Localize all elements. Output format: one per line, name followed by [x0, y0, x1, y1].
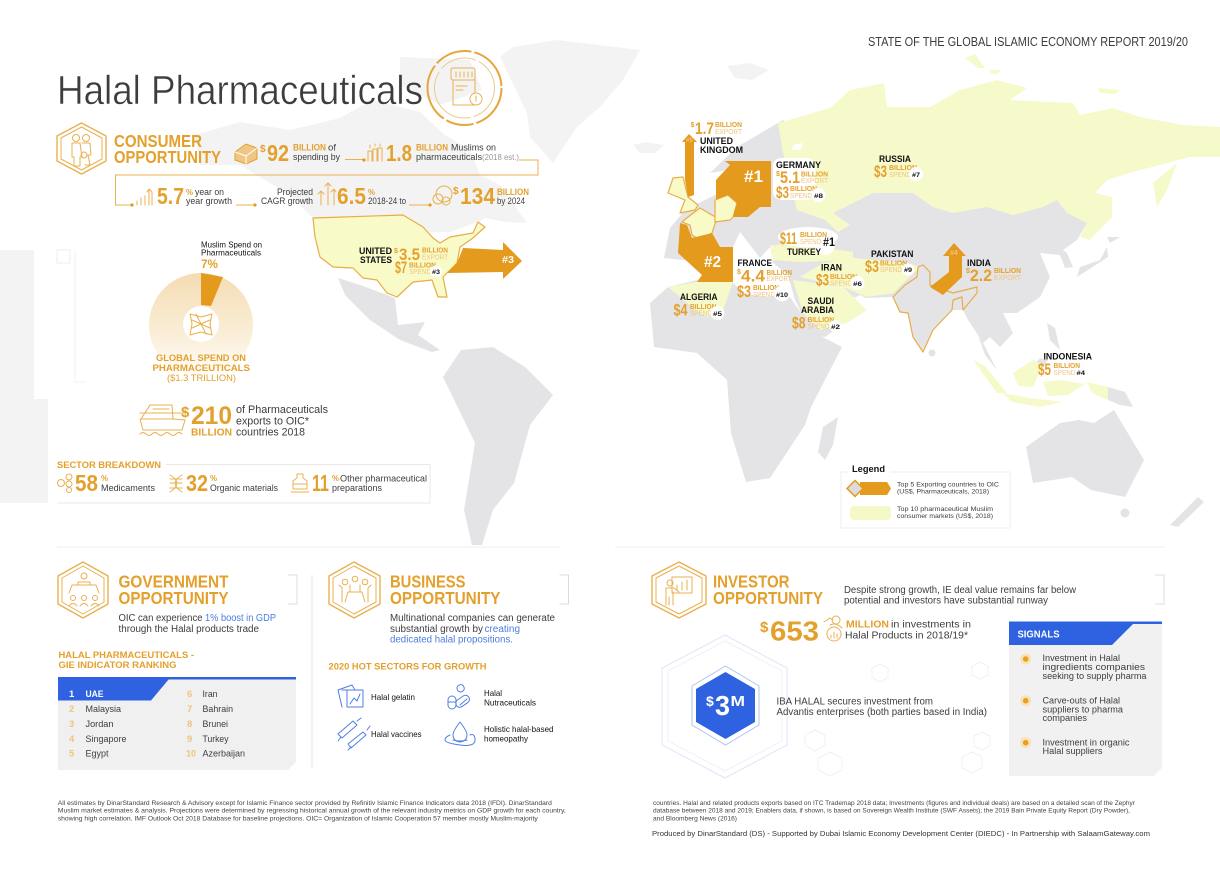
map label: Indonesia [1038, 352, 1092, 379]
rank 6 to 10: Brunei [202, 719, 228, 730]
stat: medicaments 58 percent: Medicaments [101, 483, 155, 493]
map label: Saudi Arabia: ARABIA [801, 305, 834, 315]
map label: Germany [776, 160, 829, 202]
text: IBA Halal deal [776, 696, 987, 718]
arrow: United Kingdom #5 [682, 134, 697, 197]
map label: Saudi Arabia: BILLION [808, 317, 834, 324]
map label: Pakistan: BILLION [880, 260, 907, 268]
arrow: Germany #1 [716, 161, 771, 217]
stat: projected CAGR: CAGR growth [261, 196, 313, 206]
stat: projected CAGR [261, 183, 406, 209]
map label: Saudi Arabia: SAUDI [808, 296, 834, 306]
map label: Pakistan: #9 [904, 267, 912, 274]
map label: Indonesia: INDONESIA [1044, 352, 1092, 362]
heading: business opportunity: OPPORTUNITY [390, 588, 501, 608]
map label: Germany: EXPORT [801, 178, 829, 185]
heading: investor opportunity [713, 572, 823, 608]
map label: Iran: $3 [816, 272, 829, 290]
footnote: left column: Muslim market estimates & analysis. Projections were determined by regressing historical annual growth of the relevant industry metrics on GDP growth for each country, [58, 808, 566, 814]
sector: halal vaccines [338, 718, 422, 750]
stat: other preparations 11 percent: preparations [332, 483, 382, 493]
panel: consumer opportunity [57, 123, 538, 209]
badge: 3M hexagon: 3 [715, 690, 730, 721]
stat: 653 million: in investments in [891, 618, 971, 630]
icon: investor hexagon [652, 562, 706, 618]
legend item: top 10 consumer markets: consumer markets (US$, 2018) [897, 513, 993, 520]
stat: 1.8 billion muslims: pharmaceuticals [416, 152, 483, 162]
pie slice: 7 percent [201, 273, 223, 306]
map label: Algeria: ALGERIA [680, 292, 718, 302]
legend item: top 5 exporters: Top 5 Exporting countries to OIC [897, 482, 999, 488]
stat: 210 billion exports: exports to OIC* [236, 416, 310, 428]
map label: United States: BILLION [409, 262, 436, 270]
footnote: left column: All estimates by DinarStandard Research & Advisory except for Islamic Finance sector provided by Refinitiv Islamic Finance Indicators data 2018 (IFDI). DinarStandard [58, 800, 552, 807]
rank 2 to 5: Egypt [86, 748, 109, 760]
stat: medicaments 58 percent: 58 [75, 470, 98, 496]
map label: Algeria: #5 [713, 311, 722, 318]
heading: business opportunity: BUSINESS [390, 572, 466, 592]
map label: Russia: $3 [874, 163, 887, 181]
panel: government opportunity [58, 562, 297, 770]
stat: organic materials 32 percent [170, 470, 278, 496]
heading: government opportunity [118, 572, 229, 608]
map label: Germany: $ [776, 171, 780, 178]
heading: business opportunity [390, 572, 501, 608]
stat: 653 million [760, 616, 971, 646]
map label: United States: $7 [395, 259, 407, 277]
arrow: United States #3 [447, 242, 522, 279]
icon: cargo ship [140, 405, 185, 436]
map label: France: #10 [776, 292, 788, 299]
heading: sector breakdown: SECTOR BREAKDOWN [57, 460, 161, 471]
map label: United States: EXPORT [422, 254, 449, 262]
arrow: India #4: #4 [950, 250, 958, 257]
map label: Saudi Arabia: $8 [792, 314, 806, 332]
stat: projected CAGR: 6.5 [337, 183, 366, 209]
map label: Russia: SPEND [889, 172, 911, 179]
map label: Turkey: TURKEY [787, 247, 821, 257]
map label: Iran: #6 [853, 281, 862, 288]
legend: Legend [852, 464, 885, 475]
signal 2 [1020, 695, 1123, 723]
badge: 3M hexagon [662, 635, 787, 778]
stat: 210 billion exports: 210 [191, 402, 232, 430]
map label: United States: SPEND [409, 269, 431, 276]
map label: Russia: BILLION [889, 165, 917, 172]
rank 1: 1 [69, 689, 75, 700]
map label: Indonesia: #4 [1076, 370, 1085, 377]
stat: 210 billion exports [140, 402, 328, 438]
sector: halal nutraceuticals: Halal [484, 688, 502, 698]
map label: Algeria: BILLION [690, 304, 716, 311]
text: GDP boost: 1% boost in GDP [205, 613, 276, 624]
text: GDP boost: OIC can experience [118, 613, 203, 624]
decorative hexagons [805, 662, 990, 776]
panel: signals [1009, 622, 1162, 776]
signal 3 [1020, 737, 1130, 756]
connector lines [116, 158, 538, 207]
map: top-10 consumer markets (yellow) [668, 54, 1220, 407]
map label: United Kingdom: 1.7 [695, 120, 714, 138]
map label: Russia: RUSSIA [879, 154, 911, 164]
signal 1 [1020, 653, 1146, 681]
map label: France: EXPORT [766, 276, 792, 283]
panel: business opportunity [328, 562, 568, 750]
stat: 92 billion [235, 140, 340, 166]
rank 1: UAE [86, 689, 104, 700]
chart label: Muslim spend [201, 240, 262, 271]
rank 6 to 10: 9 [187, 734, 192, 745]
stat: other preparations 11 percent: 11 [312, 470, 329, 496]
rank 6 to 10: Iran [202, 689, 218, 700]
stat: 134 billion: $ [453, 186, 459, 197]
text: GDP boost [118, 613, 276, 635]
stat: 653 million: MILLION [846, 618, 889, 630]
map: United States highlighted [313, 215, 485, 297]
map label: Turkey: BILLION [800, 232, 827, 239]
arrow: United States #3: #3 [502, 254, 514, 266]
panel: sector breakdown [57, 460, 430, 503]
map label: Indonesia: SPEND [1054, 370, 1076, 377]
map label: Russia: #7 [912, 172, 920, 179]
map label: Germany: BILLION [790, 186, 817, 193]
map label: Iran: BILLION [830, 274, 857, 281]
chart: Muslim spend pie [149, 240, 262, 383]
rank 6 to 10: Azerbaijan [202, 748, 245, 760]
map label: France: 4.4 [741, 268, 766, 286]
map label: United Kingdom [690, 120, 743, 155]
legend item: top 5 exporters [847, 480, 999, 496]
sector: holistic homeopathy: Holistic halal-based [484, 724, 554, 734]
map label: Germany: #8 [814, 193, 823, 200]
signal 3: Investment in organic [1042, 738, 1130, 748]
stat: 5.7 percent growth: year growth [186, 196, 232, 206]
map label: India: EXPORT [994, 275, 1022, 282]
chart caption: ($1.3 TRILLION) [167, 373, 236, 383]
sector: holistic homeopathy: homeopathy [484, 734, 529, 744]
rank 2 to 5: 4 [69, 734, 75, 745]
map label: Germany: 5.1 [780, 169, 800, 187]
text: investor description: potential and investors have substantial runway [844, 596, 1048, 606]
arrow: United Kingdom #5: #5 [686, 138, 693, 144]
sector: holistic homeopathy [445, 722, 554, 745]
chart label: Muslim spend: Muslim Spend on [201, 240, 262, 250]
map label: United Kingdom: UNITED [700, 136, 733, 146]
rank 1 [69, 689, 104, 700]
stat: 1.8 billion muslims: Muslims on [451, 142, 496, 152]
stat: 134 billion: 134 [460, 183, 495, 209]
sector: halal gelatin: Halal gelatin [371, 692, 415, 702]
panel: signals: SIGNALS [1018, 628, 1060, 640]
map label: Pakistan [865, 249, 914, 276]
rank 6 to 10: 10 [186, 748, 196, 760]
stat: 1.8 billion muslims [368, 140, 519, 166]
stat: 5.7 percent growth [137, 183, 232, 209]
world map [195, 40, 1220, 545]
heading: ranking: HALAL PHARMACEUTICALS - [58, 650, 194, 661]
map label: Turkey: $11 [780, 230, 797, 248]
text: business description: creating [484, 624, 520, 635]
heading: government opportunity: OPPORTUNITY [118, 588, 229, 608]
text: investor description [844, 585, 1077, 606]
map label: United States: $ [394, 248, 398, 255]
map: United Kingdom highlighted [668, 177, 698, 213]
arrow: France #2 [678, 223, 733, 282]
rank 6 to 10: 7 [187, 704, 192, 715]
map label: France: SPEND [753, 292, 775, 299]
map label: France: BILLION [753, 285, 779, 292]
stat: 1.8 billion muslims: 1.8 [386, 140, 412, 166]
map label: Iran: SPEND [830, 280, 852, 288]
rank 2 to 5: 2 [69, 704, 74, 715]
arrow: India #4 [930, 243, 966, 295]
map label: Algeria [674, 292, 724, 320]
rank 6 to 10: 8 [187, 719, 192, 730]
footnote: right column [653, 800, 1136, 822]
text: IBA Halal deal: Advantis enterprises (both parties based in India) [776, 707, 987, 718]
map label: United States: #3 [432, 269, 440, 276]
stat: projected CAGR: % [368, 188, 375, 197]
arrow: France #2: #2 [704, 254, 721, 271]
production credit: Produced by DinarStandard (DS) - Supported by Dubai Islamic Economy Development Center (DIEDC) - In Partnership with SalaamGateway.com [652, 829, 1150, 838]
stat: 210 billion exports: of Pharmaceuticals [236, 404, 328, 416]
text: business description: substantial growth by [390, 624, 483, 635]
map label: United States: 3.5 [399, 246, 420, 264]
heading: hot sectors: 2020 HOT SECTORS FOR GROWTH [328, 662, 487, 672]
map: France highlighted [682, 208, 717, 240]
stat: medicaments 58 percent: % [101, 474, 108, 483]
chart label: Muslim spend: 7% [201, 257, 218, 271]
heading: consumer opportunity [114, 131, 221, 167]
map label: Pakistan: PAKISTAN [871, 249, 914, 259]
map label: Saudi Arabia: #2 [831, 324, 840, 331]
stat: 92 billion: BILLION [293, 142, 326, 152]
legend item: top 5 exporters: (US$, Pharmaceuticals, 2018) [897, 488, 989, 496]
stat: other preparations 11 percent: Other pharmaceutical [340, 474, 427, 484]
rank 2 to 5: Singapore [86, 734, 126, 745]
stat: other preparations 11 percent: % [332, 474, 339, 483]
heading: government opportunity: GOVERNMENT [118, 572, 229, 592]
icon: consumer hexagon [57, 123, 106, 174]
rank 6 to 10: Turkey [202, 734, 229, 745]
heading: ranking: GIE INDICATOR RANKING [58, 660, 176, 671]
icon: business hexagon [329, 562, 380, 618]
map label: India: 2.2 [970, 267, 992, 285]
footnote: left column [58, 800, 566, 822]
rank 6 to 10: 6 [187, 689, 192, 700]
map label: United Kingdom: BILLION [715, 122, 742, 129]
map label: India: $ [966, 268, 970, 275]
signal 1: ingredients companies [1042, 662, 1146, 672]
map label: Germany: BILLION [801, 172, 828, 178]
stat: projected CAGR: Projected [277, 187, 313, 197]
pie centre icon [183, 306, 219, 342]
map label: France [737, 258, 792, 302]
map label: France: BILLION [766, 270, 792, 277]
legend item: top 10 consumer markets [850, 506, 993, 520]
stat: 134 billion: by 2024 [497, 196, 525, 206]
rank 2 to 5 [69, 704, 126, 760]
stat: 653 million: $ [760, 619, 769, 636]
stat: projected CAGR: 2018-24 to [368, 196, 406, 206]
rank 2 to 5: Malaysia [86, 704, 122, 715]
map label: Turkey [780, 230, 836, 257]
map label: United States [359, 246, 449, 278]
map label: Russia [874, 154, 923, 181]
text: business description: dedicated halal propositions. [390, 634, 513, 646]
signal 2: companies [1042, 713, 1088, 723]
stat: 92 billion: 92 [267, 140, 289, 166]
signal 2: suppliers to pharma [1042, 704, 1123, 714]
map label: United Kingdom: EXPORT [715, 129, 743, 136]
stat: organic materials 32 percent: 32 [186, 470, 208, 496]
map label: Turkey: SPEND [800, 239, 821, 246]
rank 2 to 5: 3 [69, 719, 74, 730]
legend [841, 463, 1010, 528]
map label: Pakistan: SPEND [880, 267, 902, 274]
heading: investor opportunity: INVESTOR [713, 572, 790, 592]
signal 2: Carve-outs of Halal [1042, 696, 1120, 706]
stat: 5.7 percent growth: 5.7 [157, 183, 184, 209]
background panel: grey side block [0, 250, 86, 503]
icon: government hexagon [58, 562, 108, 618]
chart caption: GLOBAL SPEND ON [156, 353, 246, 364]
stat: 1.8 billion muslims: BILLION [416, 142, 448, 152]
sector: halal nutraceuticals: Nutraceuticals [484, 698, 536, 708]
map label: Indonesia: $5 [1038, 361, 1051, 379]
stat: 92 billion: spending by [293, 152, 340, 162]
signal 3: Halal suppliers [1042, 746, 1103, 756]
badge: 3M hexagon: $ [706, 693, 714, 709]
map label: United States: BILLION [422, 248, 448, 254]
sector: halal nutraceuticals [448, 684, 536, 709]
signal 1: Investment in Halal [1042, 653, 1120, 663]
text: investor description: Despite strong growth, IE deal value remains far below [844, 585, 1077, 596]
map label: France: $ [737, 269, 741, 276]
sector: halal gelatin [338, 685, 415, 707]
map label: India [966, 258, 1022, 285]
stat: 92 billion: of [328, 142, 337, 152]
stat: 210 billion exports: BILLION [191, 426, 232, 438]
stat: 653 million: 653 [770, 616, 819, 646]
stat: 1.8 billion muslims: (2018 est.) [482, 152, 519, 162]
panel: investor opportunity [652, 562, 1164, 778]
rank 2 to 5: Jordan [86, 719, 114, 730]
stat: 5.7 percent growth: year on [195, 187, 224, 197]
stat: medicaments 58 percent [58, 470, 155, 496]
rank 6 to 10: Bahrain [202, 704, 233, 715]
rank 6 to 10 [186, 689, 245, 760]
map label: Pakistan: $3 [865, 258, 879, 276]
stat: organic materials 32 percent: Organic materials [210, 483, 278, 493]
stat: 92 billion: $ [260, 144, 266, 155]
icon: pharmaceutical bottle in ring [428, 51, 502, 125]
heading: consumer opportunity: CONSUMER [114, 131, 202, 151]
stat: 134 billion: BILLION [497, 187, 529, 197]
text: GDP boost: through the Halal products trade [118, 624, 259, 635]
map label: United States: STATES [360, 255, 392, 265]
chart caption: PHARMACEUTICALS [152, 363, 250, 374]
heading: investor opportunity: OPPORTUNITY [713, 588, 823, 608]
map label: Iran: IRAN [821, 262, 842, 272]
map label: Germany: $3 [776, 184, 789, 202]
map label: Indonesia: BILLION [1054, 363, 1080, 370]
legend item: top 10 consumer markets: Top 10 pharmaceutical Muslim [897, 506, 993, 513]
heading: consumer opportunity: OPPORTUNITY [114, 147, 221, 167]
footnote: right column: countries. Halal and related products exports based on ITC Trademap 2018 data; Investments (figures and individual deals) are based on a detailed scan of the Zephyr [653, 800, 1136, 807]
table: GIE indicator ranking [58, 677, 296, 770]
footnote: left column: showing high correlation. IMF Outlook Oct 2018 Database for baseline projections. OIC= Organization of Islamic Cooperation 57 member mostly Muslim-majority [58, 816, 539, 822]
rank 2 to 5: 5 [69, 748, 75, 760]
text: business description: Multinational companies can generate [390, 613, 555, 624]
chart label: Muslim spend: Pharmaceuticals [201, 248, 261, 258]
footnote: right column: and Bloomberg News (2016) [653, 816, 737, 822]
map label: France: FRANCE [738, 258, 772, 268]
chart caption [152, 353, 250, 383]
heading: ranking [58, 650, 194, 671]
map: India outline [893, 265, 977, 352]
stat: 653 million: Halal Products in 2018/19* [845, 630, 968, 642]
map label: Turkey: #1 [823, 237, 836, 249]
map label: France: $3 [737, 283, 751, 301]
map label: United Kingdom: KINGDOM [700, 145, 743, 155]
map label: India: BILLION [994, 268, 1021, 275]
title: Halal Pharmaceuticals [57, 67, 423, 113]
stat: 5.7 percent growth: % [186, 188, 193, 197]
map label: Algeria: $4 [674, 302, 688, 320]
stat: other preparations 11 percent [291, 470, 427, 496]
footnote: right column: database between 2018 and 2019; Enablers data, if shown, is based on Sovereign Wealth Institute (SWF Assets); the 2019 Bain Private Equity Report (Dry Powder), [653, 808, 1130, 814]
text: business description [390, 613, 555, 646]
stat: 210 billion exports: countries 2018 [236, 426, 305, 438]
map label: Germany: SPEND [790, 193, 812, 200]
map label: United Kingdom: $ [690, 122, 694, 129]
section dividers [57, 547, 1165, 768]
map: Germany highlighted [715, 195, 737, 222]
stat: 210 billion exports: $ [181, 404, 190, 421]
map label: India: INDIA [967, 258, 991, 268]
badge: 3M hexagon: M [730, 693, 745, 710]
text: IBA Halal deal: IBA HALAL secures investment from [776, 696, 933, 708]
sector: halal vaccines: Halal vaccines [371, 729, 422, 739]
map label: Saudi Arabia: SPEND [808, 324, 830, 330]
signal 1: seeking to supply pharma [1042, 671, 1146, 681]
map label: Germany: GERMANY [776, 160, 821, 170]
pie disc [149, 273, 253, 377]
stat: organic materials 32 percent: % [210, 474, 217, 483]
arrow: Germany #1: #1 [744, 167, 763, 186]
map label: Iran [816, 262, 864, 290]
map label: Saudi Arabia [792, 296, 842, 332]
stat: 134 billion [433, 183, 529, 209]
map label: United States: UNITED [359, 246, 392, 256]
map label: Algeria: SPEND [690, 310, 712, 318]
